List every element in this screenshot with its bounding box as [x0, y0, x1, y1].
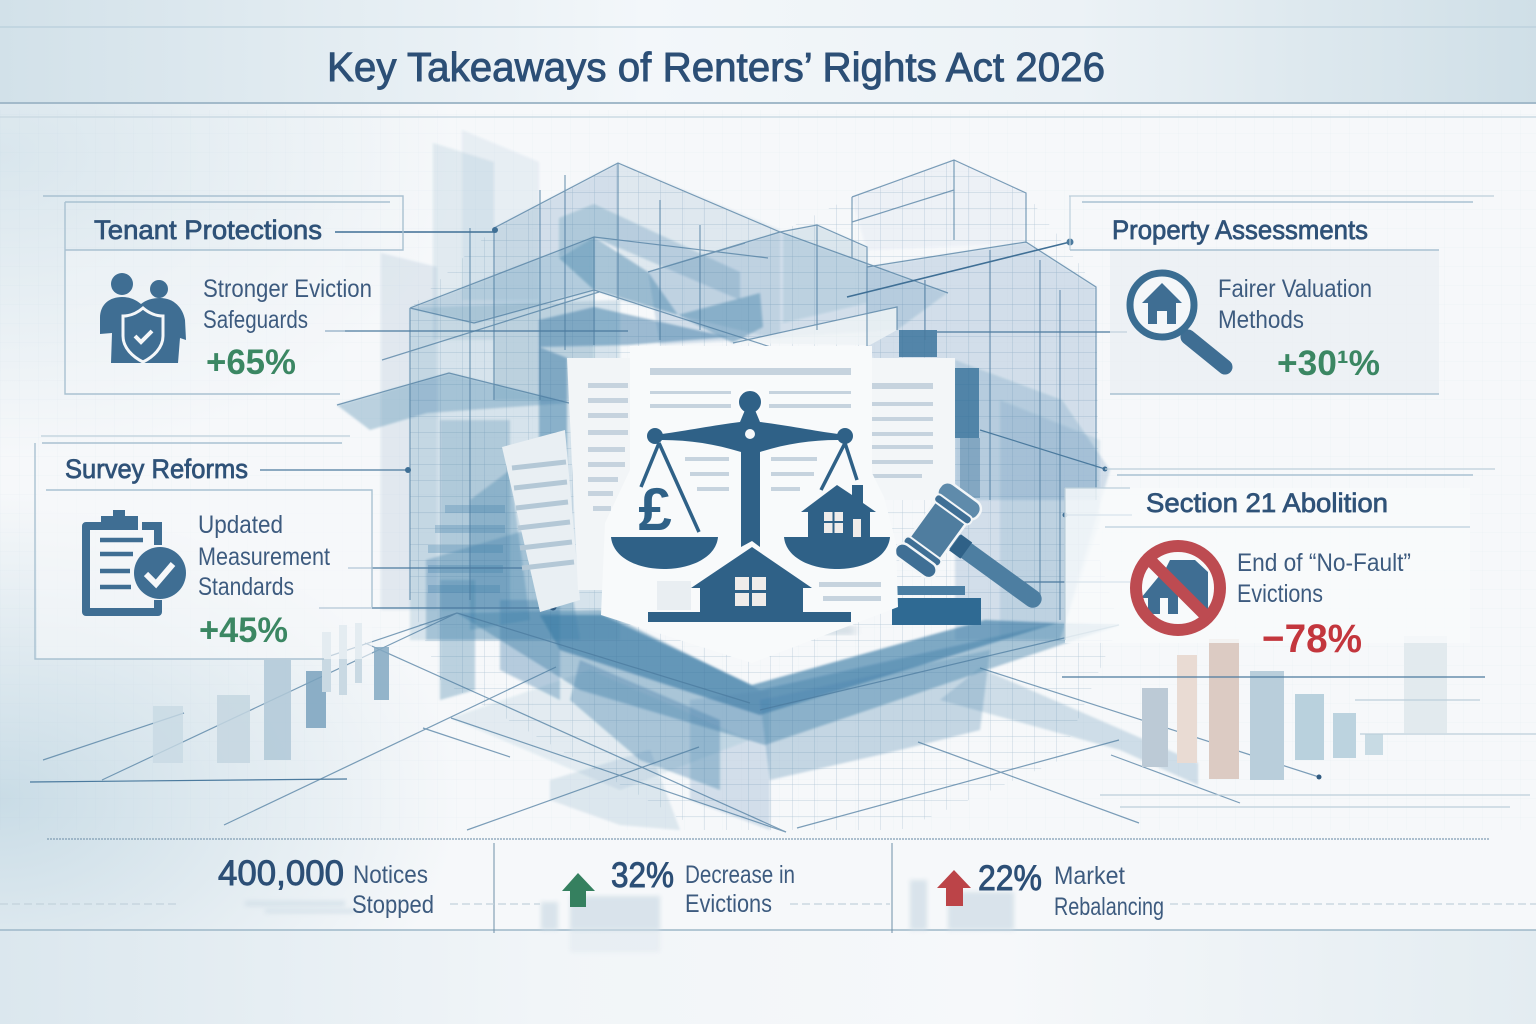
panel: survey reforms: Standards	[198, 573, 294, 601]
stat: −78%	[1262, 617, 1362, 661]
panel: property assessments	[1069, 196, 1494, 394]
panel: tenant protections: Safeguards	[203, 306, 308, 334]
heading: Tenant Protections	[94, 215, 322, 245]
small house on scale pan	[801, 485, 876, 537]
gavel	[892, 479, 1067, 641]
stat: notices stopped	[218, 854, 434, 919]
stat: market rebalancing: Market	[1054, 862, 1125, 890]
icon: red arrow	[937, 870, 971, 906]
stat: decrease in evictions: 32%	[611, 856, 674, 895]
stair strips left of documents	[428, 505, 505, 593]
stat: market rebalancing	[937, 859, 1164, 921]
icon: people with shield	[100, 273, 186, 363]
pale ledge	[733, 307, 897, 345]
title: Key Takeaways of Renters’ Rights Act 2026	[327, 44, 1105, 90]
central illustration: documents, scales, gavel	[502, 346, 1067, 663]
stat: market rebalancing: Rebalancing	[1054, 893, 1164, 921]
icon: magnifier with house	[1130, 273, 1225, 367]
stat: notices stopped: Notices	[353, 861, 428, 889]
panel: property assessments: Methods	[1218, 306, 1304, 334]
main document text lines	[650, 368, 881, 601]
panel: survey reforms: Measurement	[198, 543, 330, 571]
background bar charts	[153, 623, 1447, 780]
panel: tenant protections	[43, 196, 403, 394]
description: Stronger Eviction	[203, 275, 372, 303]
heading: Property Assessments	[1112, 215, 1368, 245]
description: Fairer Valuation	[1218, 275, 1372, 303]
dark accent blocks	[899, 330, 980, 498]
stat: decrease in evictions: Evictions	[685, 890, 772, 918]
description: Updated	[198, 511, 283, 539]
icon: clipboard with check	[86, 510, 186, 612]
glass building illustration	[43, 130, 1447, 832]
scales of justice: £	[638, 476, 672, 543]
soft shadow	[690, 628, 855, 633]
scales of justice	[611, 390, 890, 569]
gavel base	[892, 586, 981, 625]
document right	[860, 358, 955, 500]
heading: Section 21 Abolition	[1146, 488, 1388, 518]
stat: notices stopped: Stopped	[352, 891, 434, 919]
stat: +45%	[199, 611, 288, 650]
pale square on document	[657, 581, 691, 610]
stat: +65%	[206, 343, 296, 382]
stat: market rebalancing: 22%	[978, 859, 1042, 898]
document left	[567, 358, 640, 590]
stat: +30¹%	[1277, 344, 1380, 383]
footer background bars	[245, 880, 1014, 952]
stat: notices stopped: 400,000	[218, 854, 344, 893]
window grid	[400, 150, 1120, 830]
main document cutout	[601, 346, 898, 663]
panel: section 21 abolition: Evictions	[1237, 580, 1323, 608]
panel: survey reforms	[35, 436, 372, 659]
stat: decrease in evictions: Decrease in	[685, 861, 795, 889]
footer stats strip	[0, 839, 1536, 952]
house and base	[648, 547, 851, 622]
description: End of “No-Fault”	[1237, 549, 1411, 577]
heading: Survey Reforms	[65, 454, 248, 484]
building outlines	[43, 160, 1319, 832]
stat: decrease in evictions	[562, 856, 795, 918]
panel: section 21 abolition	[1065, 469, 1495, 661]
connector lines	[30, 227, 1536, 807]
icon: no eviction sign	[1136, 546, 1220, 630]
icon: green arrow	[562, 873, 595, 907]
rear document left	[502, 430, 580, 612]
